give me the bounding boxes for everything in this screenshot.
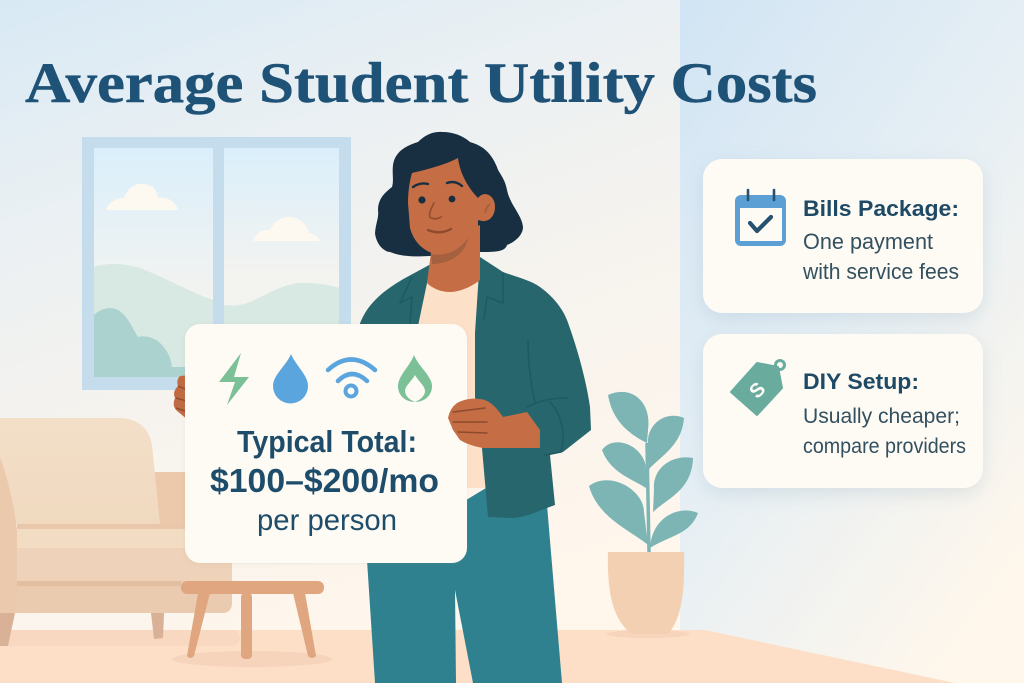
potted plant [589, 392, 698, 638]
trousers [367, 488, 562, 683]
coffee table [172, 581, 332, 667]
icon: electricity bolt [219, 353, 249, 405]
ear [478, 194, 495, 221]
sign text: typical total: $100–$200/mo [210, 462, 439, 499]
icon: price tag: S [745, 378, 770, 403]
DIY setup text: Usually cheaper; [803, 405, 960, 428]
sofa [0, 418, 240, 646]
left hand [174, 375, 195, 420]
bills package text [802, 196, 959, 284]
sign card [185, 324, 467, 563]
shirt [418, 278, 486, 488]
icon: wifi [328, 360, 375, 396]
sign text: typical total: Typical Total: [237, 424, 417, 459]
DIY setup text: DIY Setup: [803, 369, 919, 394]
jacket [359, 257, 591, 518]
jacket seams [400, 273, 567, 455]
window with landscape [82, 137, 351, 390]
DIY setup text [803, 369, 966, 458]
icon: gas flame [398, 355, 432, 402]
person holding sign [174, 132, 591, 683]
bills package text: with service fees [802, 259, 959, 284]
facial features [413, 182, 490, 232]
icon: price tag [731, 360, 784, 415]
hair [375, 132, 523, 256]
sign text: typical total: per person [257, 504, 397, 537]
sign text: typical total [210, 424, 439, 537]
title: Average Student Utility Costs [25, 52, 817, 115]
card: bills package [703, 159, 983, 313]
right hand over sign [448, 399, 540, 448]
icon: calendar [735, 190, 786, 246]
card: DIY setup [703, 334, 983, 488]
bills package text: Bills Package: [803, 196, 959, 221]
face [408, 158, 478, 255]
DIY setup text: compare providers [803, 435, 966, 458]
bills package text: One payment [803, 229, 933, 254]
chin shadow [431, 238, 468, 264]
neck [427, 225, 480, 292]
icon: water drop [273, 354, 308, 404]
